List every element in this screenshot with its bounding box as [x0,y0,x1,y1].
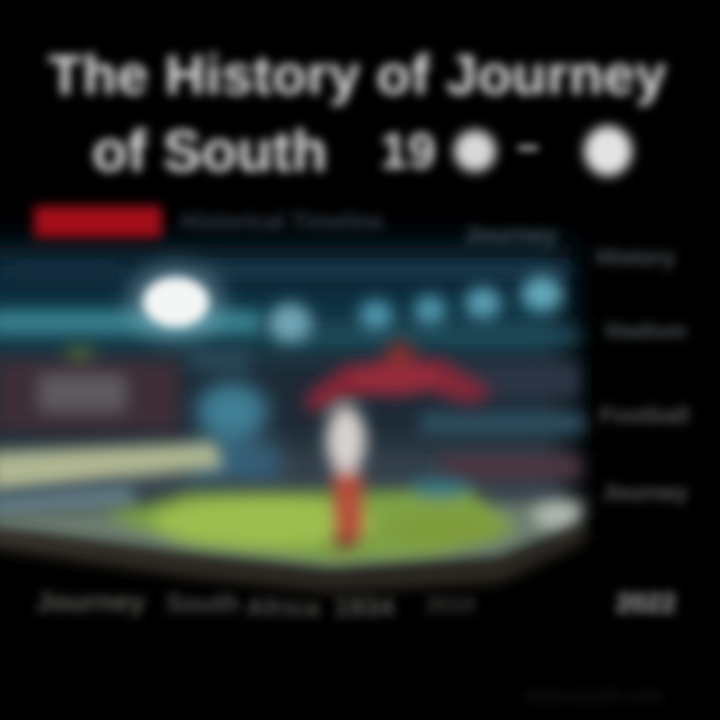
right column labels [592,244,693,508]
caption word 4: 1934 [334,592,394,622]
right label 2: Stadium [604,320,687,343]
red label badge [34,206,162,238]
title: 19 [380,123,436,179]
right label 1: History [596,244,675,270]
blue stand glow [190,382,280,479]
right label 3: Football [600,402,689,428]
left stand crowd [0,347,585,479]
floodlights [128,264,563,343]
pitch lower edge [0,528,585,590]
header caption: Historical Timeline [180,208,384,234]
right label 4: Journey [602,480,688,505]
title: of South [92,119,327,184]
caption word 2: South [166,588,240,618]
bottom right label: 2022 [616,588,676,618]
bottom captions [34,586,478,622]
pale left stand strip [0,442,224,492]
caption word 3: Africa [246,592,320,622]
footer faint text: www.south.com [525,686,662,706]
stadium sky background [0,245,570,520]
teal horizon band [0,310,580,342]
blue left lower stand [0,484,140,522]
header side caption: Journey [464,222,557,249]
caption word 1: Journey [36,586,145,617]
player [305,341,495,548]
title [42,43,672,186]
caption word 5: 2010 [426,592,475,617]
pitch [0,478,585,572]
upper stand rows [10,264,570,276]
title: The History of Journey [48,43,667,106]
